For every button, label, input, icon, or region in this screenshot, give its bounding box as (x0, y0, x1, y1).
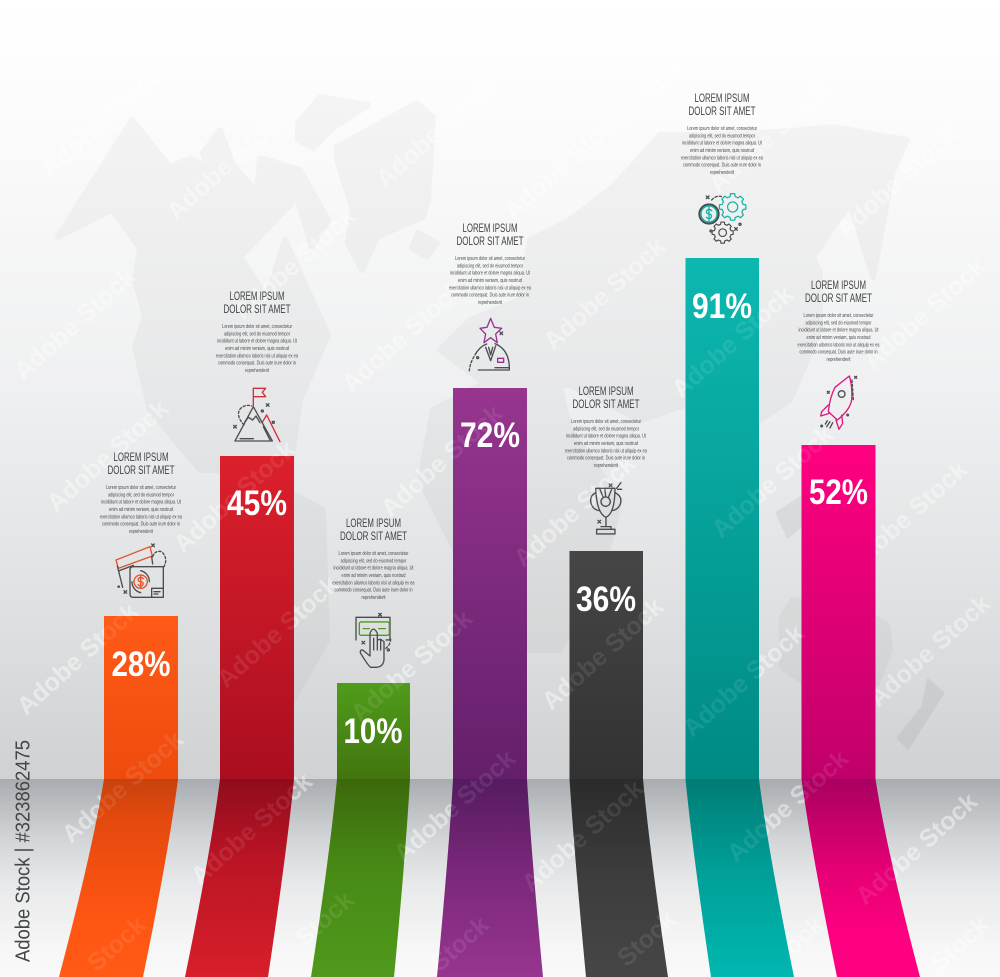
icon: rocket (821, 376, 857, 429)
text block: 91%: commodo consequat. Duis aute irure dolor in (683, 163, 761, 169)
column (686, 258, 759, 779)
watermark pattern behind bars: Adobe Stock (841, 455, 973, 579)
text block: 36%: incididunt ut labore et dolore magna aliqua. Ut (566, 434, 646, 440)
text block: 91%: reprehenderit (710, 170, 734, 176)
watermark pattern behind bars: Adobe Stock (337, 275, 469, 399)
world map silhouette (58, 97, 943, 760)
watermark pattern behind bars: Adobe Stock (678, 619, 810, 743)
text block: 10%: exercitation ullamco laboris nisi ut aliquip ex ea (332, 580, 415, 586)
watermark pattern over bars: Adobe Stock (212, 570, 344, 694)
watermark pattern behind bars: Adobe Stock (36, 60, 168, 184)
text block: 36%: adipiscing elit, sed do eiusmod tempor (573, 426, 639, 432)
text block: 72%: DOLOR SIT AMET (456, 236, 524, 248)
text block: 52%: reprehenderit (826, 357, 851, 363)
watermark pattern over bars: Adobe Stock (851, 787, 983, 911)
floor ribbon (570, 779, 668, 977)
text block: 10%: DOLOR SIT AMET (340, 531, 407, 543)
text block: 10%: reprehenderit (362, 595, 386, 601)
watermark pattern over bars: Adobe Stock (509, 449, 641, 573)
text block: 36%: LOREM IPSUM (578, 386, 634, 398)
text block: 52%: DOLOR SIT AMET (805, 293, 872, 305)
watermark pattern behind bars: Adobe Stock (704, 75, 836, 199)
text block: 52%: incididunt ut labore et dolore magna aliqua. Ut (798, 328, 879, 334)
text block: 45% (216, 291, 298, 374)
watermark pattern over bars: Adobe Stock (707, 420, 839, 544)
text block: 10%: LOREM IPSUM (346, 518, 401, 530)
text block: 28% (100, 452, 182, 535)
text block: 28%: enim ad minim veniam, quis nostrud (109, 507, 173, 513)
bar: 36% charcoal (570, 551, 668, 977)
text block: 36%: Lorem ipsum dolor sit amet, consectetur (571, 419, 641, 425)
watermark pattern over bars (12, 280, 983, 977)
text block: 36%: commodo consequat. Duis aute irure dolor in (567, 456, 645, 462)
text block: 45%: enim ad minim veniam, quis nostrud (225, 346, 289, 352)
watermark pattern behind bars: Adobe Stock (831, 120, 963, 244)
watermark pattern behind bars: Adobe Stock (509, 449, 641, 573)
watermark pattern over bars: Adobe Stock (12, 597, 144, 721)
text block: 72%: Lorem ipsum dolor sit amet, consectetur (455, 256, 525, 262)
text block: 28%: DOLOR SIT AMET (108, 465, 174, 477)
percentage value: 36% (576, 580, 636, 619)
watermark pattern over bars: Adobe Stock (376, 399, 508, 523)
text block: 28%: Lorem ipsum dolor sit amet, consectetur (106, 485, 176, 491)
text block: 10%: Lorem ipsum dolor sit amet, consectetur (338, 551, 409, 557)
text block: 91%: Lorem ipsum dolor sit amet, consectetur (687, 126, 757, 132)
watermark pattern behind bars: Adobe Stock (376, 399, 508, 523)
column (453, 388, 527, 779)
watermark pattern over bars: Adobe Stock (537, 592, 669, 716)
watermark pattern behind bars: Adobe Stock (186, 767, 318, 891)
watermark pattern behind bars: Adobe Stock (864, 589, 996, 713)
text block: 28%: LOREM IPSUM (114, 452, 168, 464)
watermark pattern behind bars: Adobe Stock (57, 725, 189, 849)
watermark pattern behind bars: Stock (290, 886, 359, 952)
watermark pattern behind bars: Adobe Stock (667, 280, 799, 404)
text block: 36%: DOLOR SIT AMET (572, 399, 640, 411)
text block: 91%: incididunt ut labore et dolore magna aliqua. Ut (682, 141, 762, 147)
watermark pattern behind bars: Stock (760, 911, 829, 977)
watermark pattern over bars: Adobe Stock (389, 744, 521, 868)
text block: 45%: reprehenderit (245, 368, 269, 374)
text block: 52%: exercitation ullamco laboris nisi ut aliquip ex ea (798, 342, 880, 348)
text block: 45%: exercitation ullamco laboris nisi ut aliquip ex ea (216, 353, 298, 359)
text block: 52%: LOREM IPSUM (811, 280, 866, 292)
text block: 10%: adipiscing elit, sed do eiusmod tempor (340, 558, 407, 564)
text block: 28%: exercitation ullamco laboris nisi ut aliquip ex ea (100, 514, 182, 520)
text block: 52%: commodo consequat. Duis aute irure dolor in (800, 350, 878, 356)
text block: 72%: commodo consequat. Duis aute irure dolor in (451, 293, 529, 299)
watermark pattern behind bars: Adobe Stock (371, 70, 503, 194)
column (220, 456, 294, 779)
text block: 72%: reprehenderit (478, 300, 502, 306)
text block: 91%: DOLOR SIT AMET (688, 106, 756, 118)
watermark pattern behind bars: Stock (925, 911, 994, 977)
floor ribbon (437, 779, 543, 977)
text block: 28%: incididunt ut labore et dolore magna aliqua. Ut (101, 500, 181, 506)
watermark pattern behind bars: Adobe Stock (499, 102, 631, 226)
text block: 72%: LOREM IPSUM (462, 223, 518, 235)
text block: 72%: enim ad minim veniam, quis nostrud (458, 278, 522, 284)
watermark pattern over bars: Adobe Stock (517, 774, 649, 898)
text block: 10%: commodo consequat. Duis aute irure dolor in (334, 588, 413, 594)
watermark pattern over bars: Adobe Stock (678, 619, 810, 743)
column (570, 551, 643, 779)
text block: 45%: LOREM IPSUM (230, 291, 284, 303)
watermark pattern behind bars: Adobe Stock (539, 232, 671, 356)
watermark pattern behind bars: Adobe Stock (851, 787, 983, 911)
icon: credit card and payment screen (116, 544, 166, 597)
watermark pattern over bars: Stock (612, 906, 681, 972)
watermark pattern behind bars: Adobe Stock (537, 592, 669, 716)
watermark pattern over bars: Adobe Stock (722, 744, 854, 868)
watermark pattern over bars: Stock (425, 911, 494, 977)
watermark pattern behind bars: Adobe Stock (707, 420, 839, 544)
watermark pattern over bars: Adobe Stock (169, 435, 301, 559)
text block: 36% (565, 386, 647, 469)
text block: 36%: enim ad minim veniam, quis nostrud (574, 441, 638, 447)
bar: 52% magenta (802, 445, 920, 977)
bar: 91% teal (686, 258, 794, 977)
watermark pattern behind bars: Adobe Stock (169, 435, 301, 559)
watermark pattern behind bars: Stock (612, 906, 681, 972)
text block: 45%: commodo consequat. Duis aute irure dolor in (218, 361, 296, 367)
text block: 10% (332, 518, 415, 601)
text block: 52%: adipiscing elit, sed do eiusmod tempor (806, 320, 872, 326)
vertical stock id text: Adobe Stock | #323862475 (12, 740, 34, 962)
text block: 45%: adipiscing elit, sed do eiusmod tempor (224, 331, 290, 337)
watermark pattern behind bars: Adobe Stock (346, 604, 478, 728)
text block: 72%: incididunt ut labore et dolore magna aliqua. Ut (450, 271, 530, 277)
icon: mountain with flag (234, 388, 280, 442)
watermark pattern behind bars: Adobe Stock (12, 597, 144, 721)
text block: 45%: DOLOR SIT AMET (224, 304, 290, 316)
text block: 72%: exercitation ullamco laboris nisi ut aliquip ex ea (449, 285, 531, 291)
watermark pattern over bars: Stock (290, 886, 359, 952)
watermark pattern behind bars: Stock (82, 911, 151, 977)
floor ribbon (802, 779, 920, 977)
bar: 45% red (185, 456, 294, 977)
text block: 91%: exercitation ullamco laboris nisi ut aliquip ex ea (681, 155, 763, 161)
floor ribbon (311, 779, 410, 977)
percentage value: 10% (344, 712, 402, 751)
icon: hand on banknote (356, 613, 391, 667)
text block: 36%: exercitation ullamco laboris nisi ut aliquip ex ea (565, 448, 647, 454)
watermark pattern behind bars: Adobe Stock (212, 570, 344, 694)
floor ribbon (686, 779, 794, 977)
text block: 28%: reprehenderit (129, 529, 153, 535)
watermark pattern over bars: Adobe Stock (346, 604, 478, 728)
percentage value: 72% (460, 416, 520, 455)
percentage value: 45% (227, 484, 287, 523)
watermark pattern over bars: Adobe Stock (57, 725, 189, 849)
floor ribbon (59, 779, 178, 977)
watermark pattern behind bars: Adobe Stock (42, 394, 174, 518)
text block: 91% (681, 93, 763, 176)
text block: 72%: adipiscing elit, sed do eiusmod tempor (457, 263, 523, 269)
watermark pattern over bars: Stock (82, 911, 151, 977)
percentage value: 28% (112, 645, 170, 684)
watermark pattern behind bars: Adobe Stock (517, 774, 649, 898)
watermark pattern over bars: Adobe Stock (186, 767, 318, 891)
watermark pattern behind bars: Adobe Stock (389, 744, 521, 868)
percentage value: 91% (692, 287, 752, 326)
watermark pattern behind bars: Adobe Stock (162, 102, 294, 226)
text block: 91%: adipiscing elit, sed do eiusmod tempor (689, 133, 755, 139)
icon: star over shoulders (469, 318, 509, 371)
text block: 28%: adipiscing elit, sed do eiusmod tempor (108, 492, 174, 498)
watermark pattern over bars: Adobe Stock (667, 280, 799, 404)
floor ribbon (185, 779, 294, 977)
column (337, 683, 410, 779)
watermark pattern behind bars: Adobe Stock (859, 252, 991, 376)
watermark pattern behind bars: Adobe Stock (229, 202, 361, 326)
text block: 52%: Lorem ipsum dolor sit amet, consectetur (804, 313, 874, 319)
text block: 91%: LOREM IPSUM (694, 93, 750, 105)
text block: 91%: enim ad minim veniam, quis nostrud (690, 148, 754, 154)
watermark pattern behind bars: Stock (425, 911, 494, 977)
icon: trophy (591, 483, 622, 534)
column (104, 616, 178, 779)
bar: 72% purple (437, 388, 543, 977)
text block: 45%: incididunt ut labore et dolore magna aliqua. Ut (217, 339, 297, 345)
column (802, 445, 876, 779)
text block: 72% (449, 223, 531, 306)
watermark pattern behind bars: Adobe Stock (722, 744, 854, 868)
bar: 10% green (311, 683, 410, 977)
text block: 10%: enim ad minim veniam, quis nostrud (342, 573, 406, 579)
percentage value: 52% (809, 473, 868, 512)
text block: 28%: commodo consequat. Duis aute irure dolor in (102, 522, 180, 528)
watermark pattern behind bars: Adobe Stock (9, 262, 141, 386)
icon: coin and gears (699, 194, 746, 243)
text block: 10%: incididunt ut labore et dolore magna aliqua. Ut (334, 566, 414, 572)
text block: 52%: enim ad minim veniam, quis nostrud (806, 335, 871, 341)
text block: 36%: reprehenderit (594, 463, 618, 469)
text block: 52% (798, 280, 880, 363)
bar: 28% orange (59, 616, 178, 977)
text block: 45%: Lorem ipsum dolor sit amet, consectetur (222, 324, 292, 330)
